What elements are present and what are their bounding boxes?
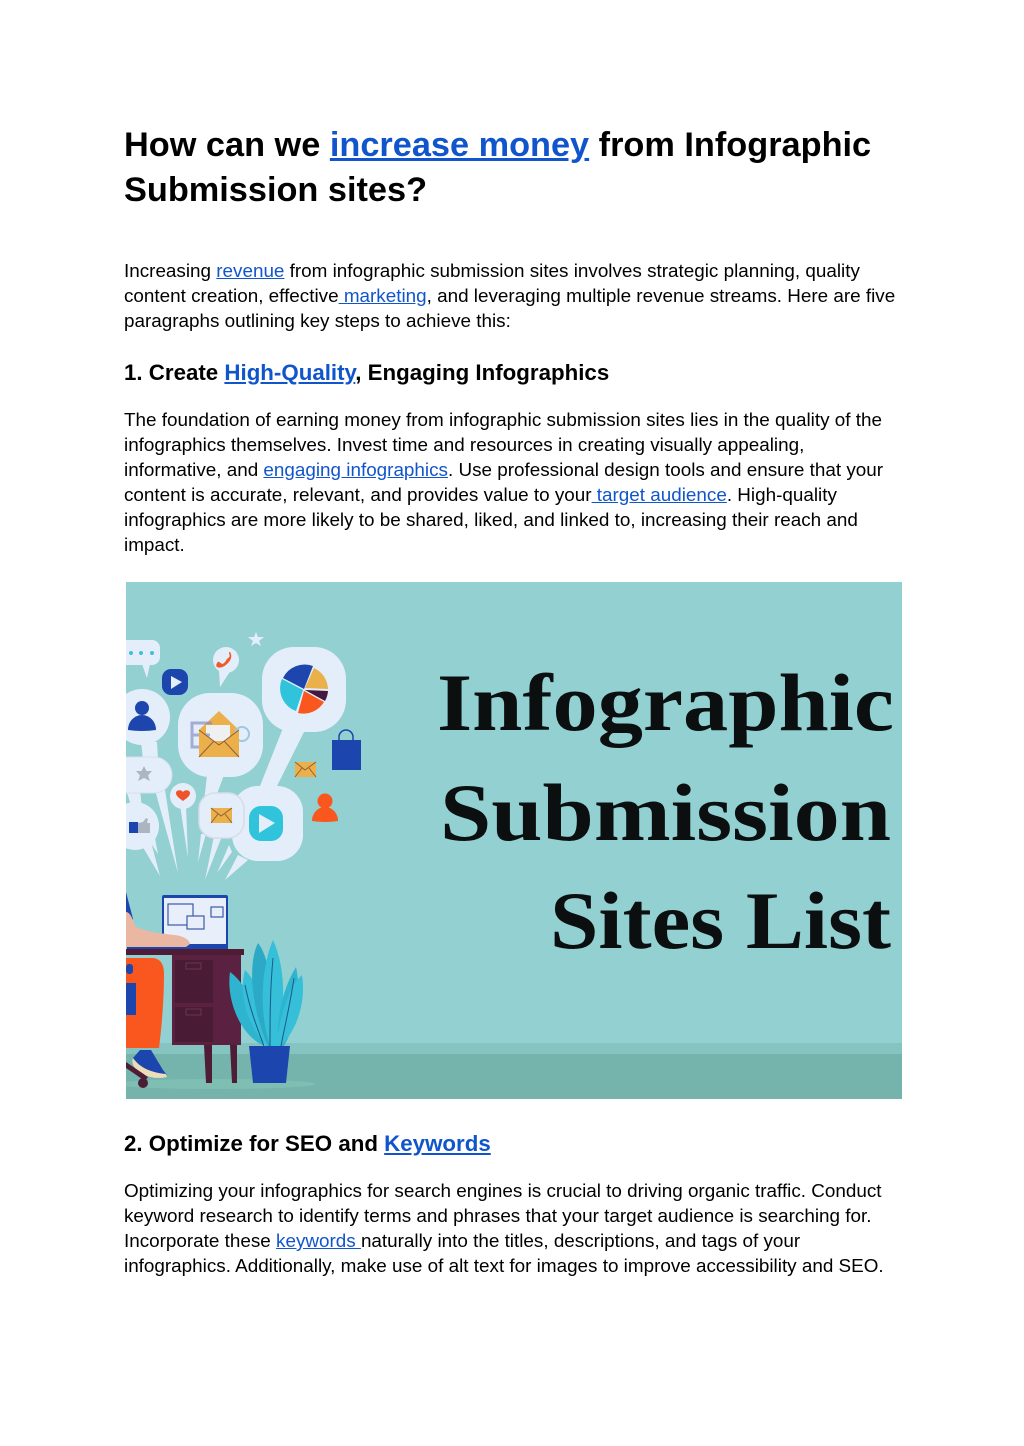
potted plant bbox=[229, 940, 303, 1083]
desk bbox=[126, 949, 244, 1083]
title bbox=[124, 126, 871, 209]
icon: envelope with letter bbox=[192, 711, 249, 757]
banner image bbox=[126, 582, 902, 1099]
person at desk bbox=[126, 892, 190, 1088]
heading: section 1: 1. Create High-Quality, Engaging Infographics bbox=[124, 360, 609, 385]
icon: blue play button bbox=[162, 669, 188, 695]
heading: section 2: 2. Optimize for SEO and Keywords bbox=[124, 1131, 491, 1156]
intro paragraph: content creation, effective marketing, and leveraging multiple revenue streams. Here are five bbox=[124, 285, 895, 306]
intro paragraph: Increasing revenue from infographic submission sites involves strategic planning, quality bbox=[124, 260, 860, 281]
icon: pie chart bbox=[280, 664, 328, 714]
paragraph: section 2 bbox=[124, 1180, 884, 1276]
icon: cyan play button bbox=[249, 806, 283, 841]
intro paragraph: paragraphs outlining key steps to achieve this: bbox=[124, 310, 511, 331]
paragraph: section 2: infographics. Additionally, make use of alt text for images to improve accessibility and SEO. bbox=[124, 1255, 884, 1276]
paragraph: section 1: infographics themselves. Invest time and resources in creating visually appealing, bbox=[124, 434, 804, 455]
paragraph: section 1: impact. bbox=[124, 534, 185, 555]
intro paragraph bbox=[124, 260, 895, 331]
icon: grey star bbox=[136, 766, 152, 781]
icon: floating envelope bbox=[295, 762, 316, 777]
speech bubbles bbox=[126, 640, 346, 880]
title: How can we increase money from Infographic bbox=[124, 126, 871, 164]
laptop bbox=[127, 895, 228, 950]
banner title bbox=[440, 672, 892, 949]
paragraph: section 2: Incorporate these keywords naturally into the titles, descriptions, and tags of your bbox=[124, 1230, 800, 1251]
paragraph: section 1: The foundation of earning money from infographic submission sites lies in the quality of the bbox=[124, 409, 882, 430]
icon: thumbs up bbox=[129, 818, 150, 833]
icon: star bbox=[248, 632, 264, 646]
icon: chat dots bbox=[129, 651, 154, 655]
icon: shopping bag bbox=[332, 730, 361, 770]
paragraph: section 1 bbox=[124, 409, 883, 555]
banner background bbox=[115, 582, 902, 1099]
paragraph: section 2: Optimizing your infographics for search engines is crucial to driving organic traffic. Conduct bbox=[124, 1180, 882, 1201]
title: Submission sites? bbox=[124, 171, 427, 209]
icon: blue person bbox=[128, 701, 156, 731]
paragraph: section 2: keyword research to identify terms and phrases that your target audience is searching for. bbox=[124, 1205, 871, 1226]
banner title: Infographic bbox=[437, 657, 894, 748]
paragraph: section 1: infographics are more likely to be shared, liked, and linked to, increasing their reach and bbox=[124, 509, 858, 530]
banner title: Sites List bbox=[550, 875, 891, 966]
icon: phone bbox=[216, 652, 231, 668]
paragraph: section 1: content is accurate, relevant, and provides value to your target audience. High-quality bbox=[124, 484, 837, 505]
banner title: Submission bbox=[440, 767, 891, 858]
icon: small envelope in bubble bbox=[211, 808, 232, 823]
paragraph: section 1: informative, and engaging infographics. Use professional design tools and ensure that your bbox=[124, 459, 883, 480]
icon: orange person bbox=[312, 794, 338, 822]
icon: heart bbox=[176, 790, 190, 801]
